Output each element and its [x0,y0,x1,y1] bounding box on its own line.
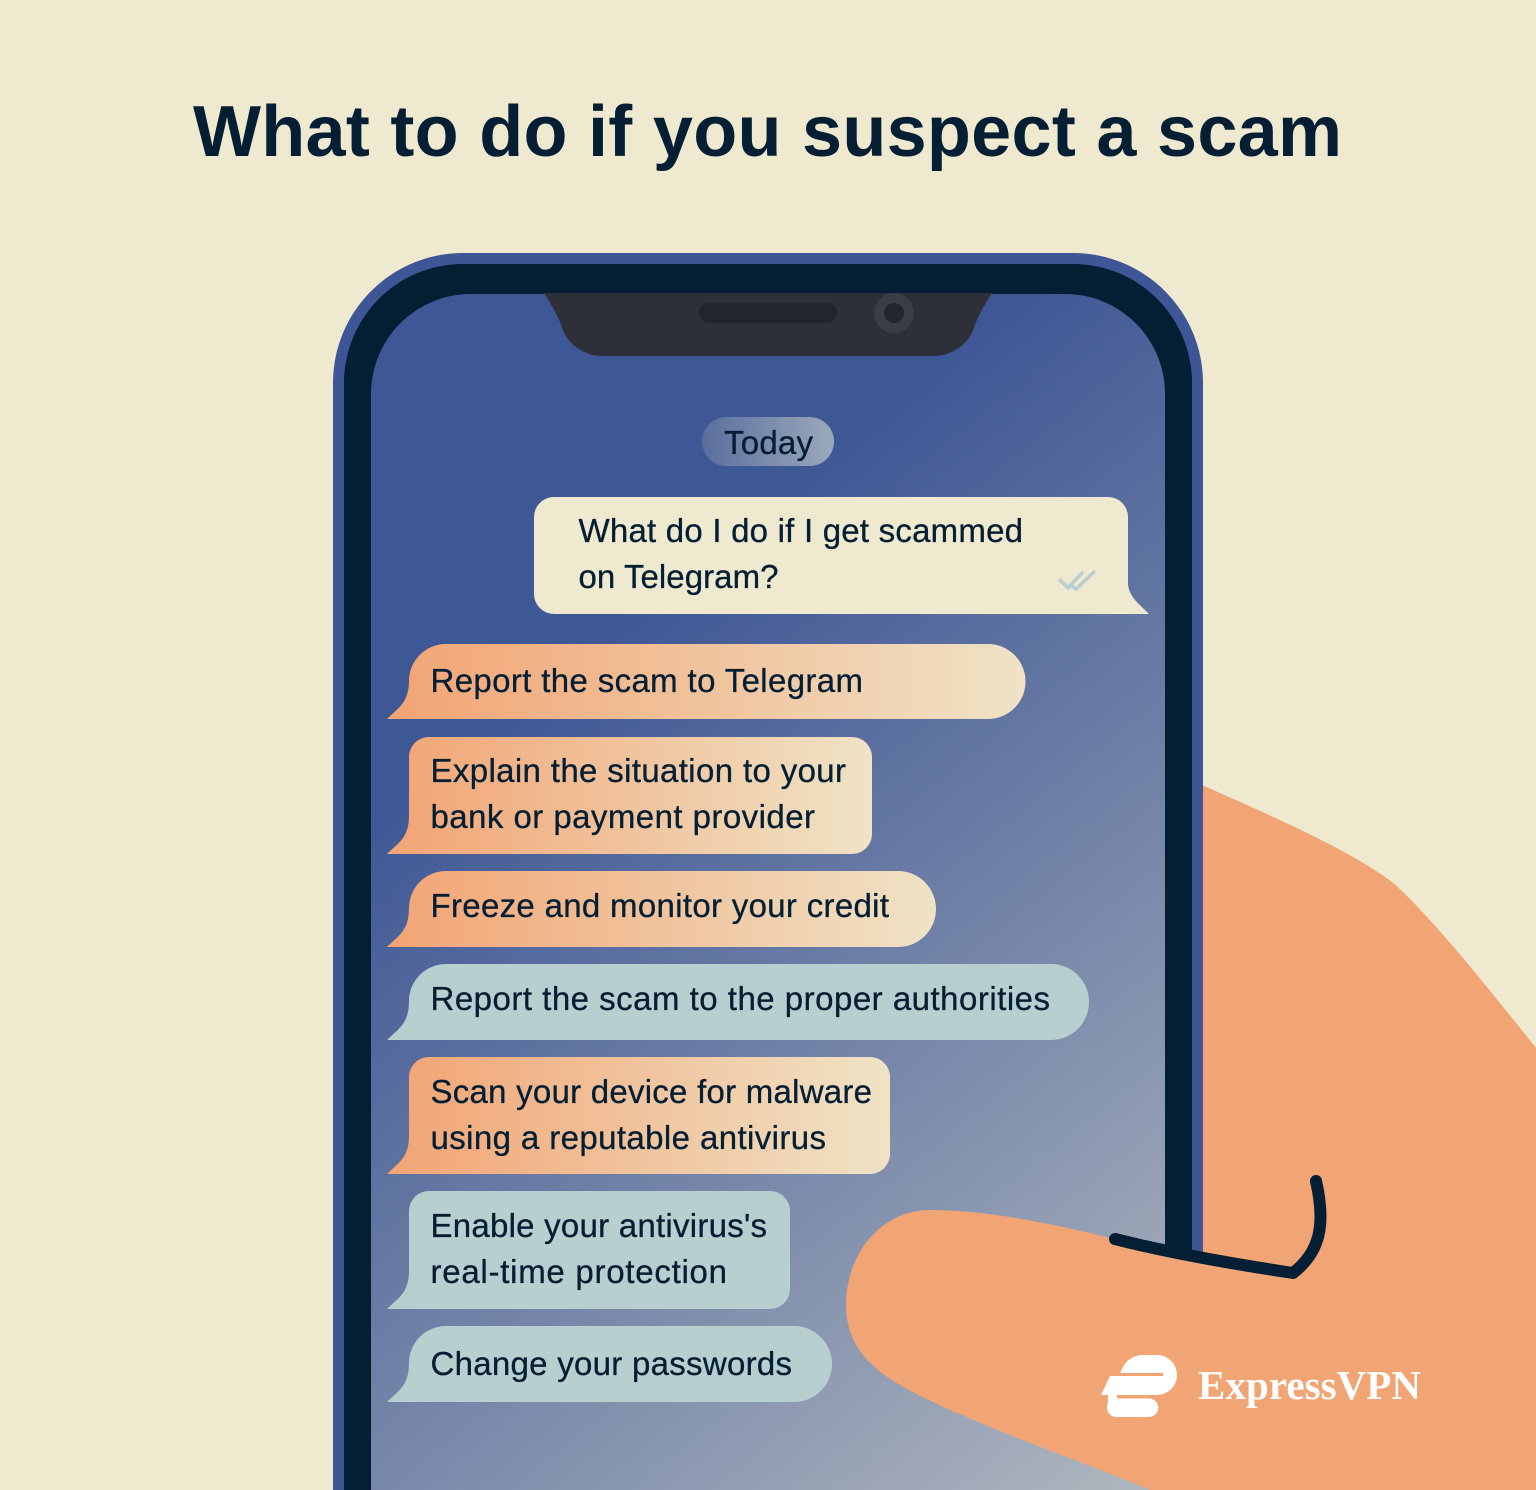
answer bubble: report to Telegram [387,644,1026,719]
phone screen [371,294,1165,1490]
answer bubble: scan for malware: Scan your device for malware [430,1073,872,1110]
answer bubble: scan for malware: using a reputable antivirus [430,1119,826,1156]
answer bubble: explain to bank: bank or payment provider [430,798,815,835]
answer bubble: change passwords [387,1326,832,1402]
answer bubble: report to authorities [387,964,1089,1040]
hand: back of palm [1195,782,1536,1490]
title: What to do if you suspect a scam [193,92,1342,172]
answer bubble: scan for malware [387,1057,890,1174]
thumbnail outline [1115,1181,1321,1273]
phone bezel [344,264,1192,1490]
icon: double check marks [1059,571,1095,589]
hand: thumb [846,1210,1536,1490]
icon: ExpressVPN mark [1101,1355,1177,1417]
answer bubble: report to Telegram: Report the scam to Telegram [430,662,863,699]
phone [333,253,1203,1490]
answer bubble: change passwords: Change your passwords [430,1345,792,1382]
question bubble [534,497,1149,614]
answer bubble: real-time protection: Enable your antivirus's [430,1207,767,1244]
question bubble: on Telegram? [578,558,778,595]
logo: ExpressVPN: ExpressVPN [1198,1362,1421,1408]
answer bubble: freeze credit [387,871,936,947]
answer bubble: freeze credit: Freeze and monitor your credit [430,887,889,924]
answer bubble: real-time protection [387,1191,790,1309]
answer bubble: real-time protection: real-time protection [430,1253,727,1290]
logo: ExpressVPN [1101,1355,1421,1417]
answer bubble: explain to bank [387,737,872,854]
date pill: Today: Today [724,424,814,461]
answer bubble: explain to bank: Explain the situation to your [430,752,846,789]
phone notch [544,293,992,356]
date pill: Today [702,417,834,466]
phone outer casing [333,253,1203,1490]
answer bubble: report to authorities: Report the scam to the proper authorities [430,980,1050,1017]
question bubble: What do I do if I get scammed [578,512,1023,549]
